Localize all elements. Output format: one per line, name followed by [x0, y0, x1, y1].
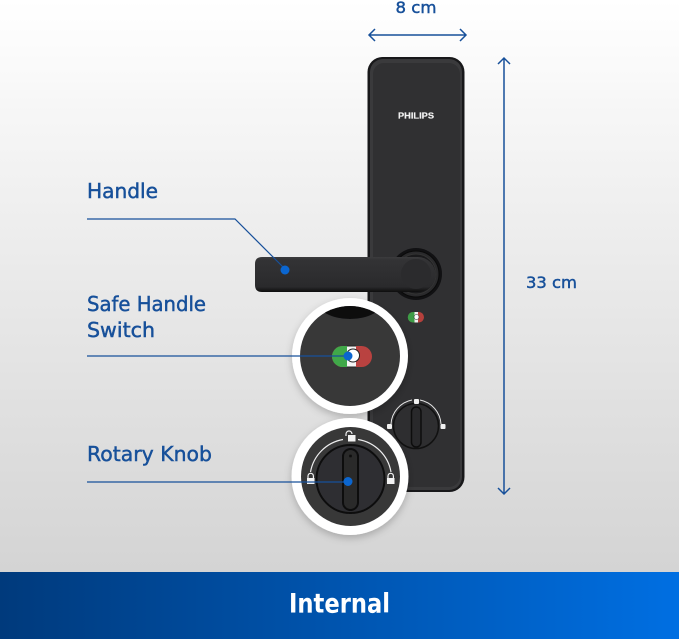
- callout: rotary knob: [87, 442, 352, 486]
- lock icons: [307, 431, 394, 484]
- brand label: PHILIPS: [398, 110, 434, 120]
- label: height dimension: 33 cm: [526, 273, 577, 292]
- callout: safe handle switch: Switch: [87, 318, 155, 342]
- callout: rotary knob: Rotary Knob: [87, 442, 212, 466]
- magnifier: safe handle switch: [292, 283, 408, 414]
- footer bar: Internal: [289, 588, 390, 620]
- label: height dimension: [498, 58, 577, 494]
- label: width dimension: [369, 0, 466, 41]
- magnifier: rotary knob: [292, 418, 408, 535]
- callout: safe handle switch: [87, 292, 352, 360]
- callout: handle: [87, 179, 290, 274]
- callout: handle: Handle: [87, 179, 158, 203]
- callout: safe handle switch: Safe Handle: [87, 292, 206, 316]
- small status switch: [408, 312, 424, 322]
- handle lever: [255, 257, 436, 292]
- rose: [390, 248, 442, 300]
- lock body: [368, 57, 464, 492]
- enlarged switch: [332, 346, 372, 367]
- footer bar: [0, 572, 679, 639]
- small rotary knob: [387, 399, 446, 448]
